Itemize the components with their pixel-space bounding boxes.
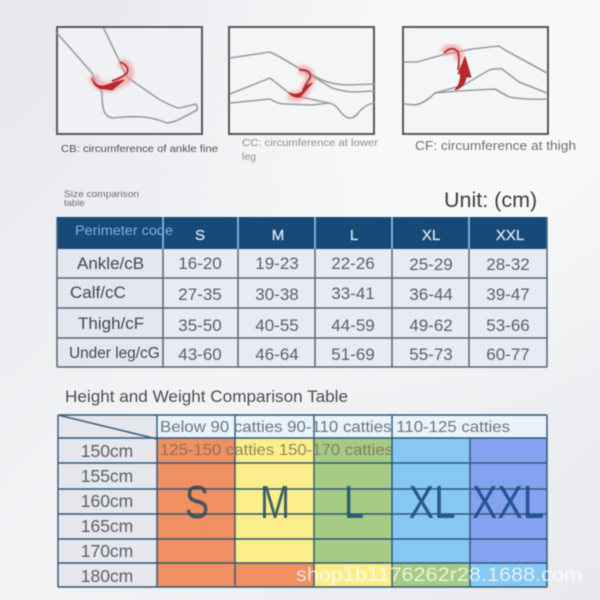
row: under leg: 46-64	[255, 345, 299, 364]
table header row: S	[195, 227, 205, 244]
heading: height and weight table: Height and Weight Comparison Table	[65, 388, 348, 406]
size letters: XXL	[472, 476, 544, 528]
height labels: 155cm	[81, 466, 133, 486]
caption: lower leg: leg	[242, 151, 256, 163]
row: thigh	[78, 314, 530, 335]
caption: thigh: CF: circumference at thigh	[415, 138, 576, 153]
row: calf: Calf/cC	[70, 283, 126, 302]
row: thigh: 35-50	[178, 316, 222, 335]
weight labels: 125-150 catties 150-170 catties	[160, 442, 393, 459]
diagonal header cell	[58, 415, 157, 439]
table: size comparison	[57, 217, 547, 367]
heading: size comparison table: Size comparison	[64, 189, 139, 200]
size letters	[185, 476, 544, 528]
panel: lower leg illustration	[229, 27, 374, 134]
row: ankle: 22-26	[331, 254, 375, 273]
weight header band	[157, 415, 547, 438]
table: height and weight	[58, 415, 547, 587]
row: thigh: Thigh/cF	[78, 314, 144, 333]
row: under leg: 43-60	[178, 345, 222, 364]
row: ankle: 28-32	[486, 255, 530, 274]
colour column: L	[314, 438, 392, 563]
table header row: Perimeter code	[75, 223, 173, 238]
row: ankle	[77, 254, 530, 274]
colour column: M	[235, 438, 314, 563]
row: ankle: 16-20	[178, 254, 222, 273]
row: calf: 30-38	[255, 285, 299, 304]
row: thigh: 40-55	[255, 316, 299, 335]
colour column: XL	[392, 438, 470, 563]
icon: thigh measuring arrow	[444, 49, 471, 90]
row: calf: 33-41	[331, 284, 375, 303]
bottom offset colour row	[235, 563, 547, 587]
size letters: S	[185, 476, 209, 528]
height labels	[81, 441, 133, 586]
height labels: 165cm	[81, 516, 133, 536]
heading: unit: Unit: (cm)	[444, 188, 537, 212]
row: thigh: 44-59	[331, 316, 375, 335]
table header row: L	[350, 227, 358, 244]
height labels: 170cm	[81, 541, 133, 561]
row: ankle: Ankle/cB	[77, 254, 144, 273]
row: ankle: 25-29	[409, 255, 453, 274]
table header row: M	[272, 227, 284, 244]
size letters: L	[344, 476, 364, 528]
panel: thigh illustration	[403, 27, 548, 134]
table header row: XL	[422, 227, 440, 244]
size letters: XL	[408, 476, 456, 528]
weight labels: Below 90 catties 90-110 catties 110-125 catties	[160, 419, 510, 436]
row: thigh: 53-66	[486, 316, 530, 335]
row: calf: 39-47	[486, 285, 530, 304]
panel: ankle illustration	[57, 27, 202, 134]
size letters: M	[260, 476, 290, 528]
row: under leg: 60-77	[486, 345, 530, 364]
height labels: 150cm	[81, 441, 133, 461]
icon: ankle measuring arrow	[92, 62, 129, 90]
row: calf	[70, 283, 530, 304]
watermark: shop1b1176262r28.1688.com	[296, 565, 582, 586]
colour column: XXL	[470, 438, 547, 563]
row: under leg: 51-69	[331, 345, 375, 364]
colour column: S	[157, 438, 235, 587]
row: calf: 27-35	[178, 285, 222, 304]
row: under leg: 55-73	[409, 345, 453, 364]
row: under leg: Under leg/cG	[69, 345, 160, 362]
icon: lower leg measuring arrow	[289, 70, 312, 97]
caption: lower leg: CC: circumference at lower	[242, 137, 379, 149]
height labels: 180cm	[81, 566, 133, 586]
row: thigh: 49-62	[409, 316, 453, 335]
weight labels	[160, 419, 510, 459]
row: ankle: 19-23	[255, 254, 299, 273]
row: calf: 36-44	[409, 285, 453, 304]
table header row: XXL	[496, 227, 524, 244]
heading: size comparison table: table	[64, 198, 85, 209]
row: under leg	[69, 345, 530, 364]
table header row	[57, 217, 547, 249]
caption: ankle: CB: circumference of ankle fine	[61, 143, 218, 155]
height labels: 160cm	[81, 491, 133, 511]
